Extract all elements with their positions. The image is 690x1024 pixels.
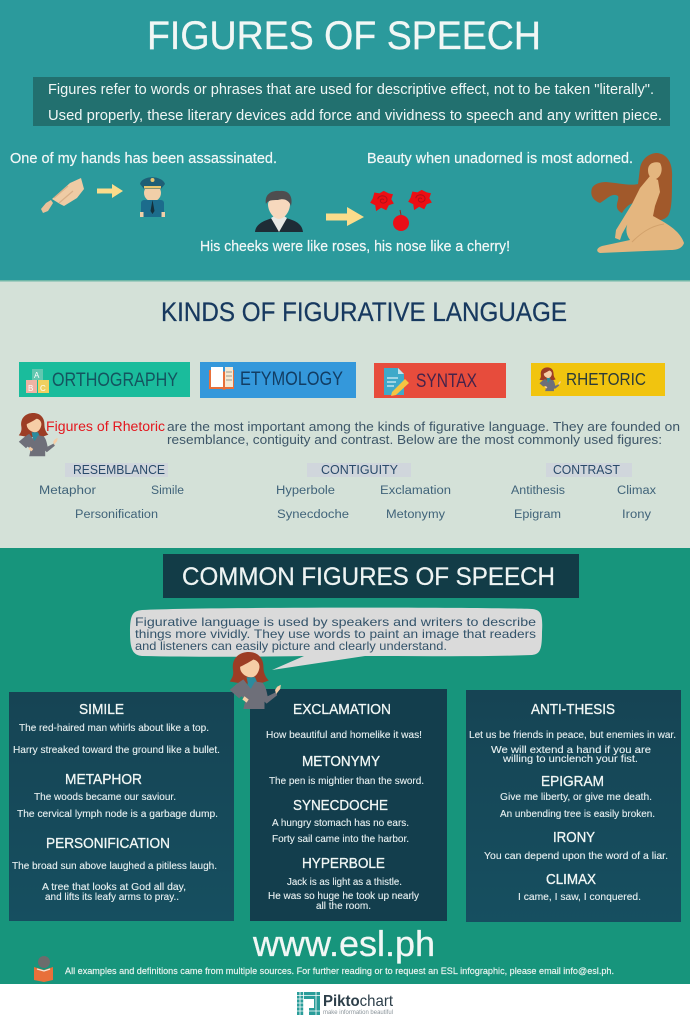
- group: contiguity: Exclamation: [380, 485, 451, 497]
- group: contiguity: [276, 463, 451, 521]
- card: exclamation, metonymy, synecdoche, hyperbole: EXCLAMATION: [293, 702, 391, 718]
- heading: KINDS OF FIGURATIVE LANGUAGE: [161, 297, 567, 327]
- group: resemblance: RESEMBLANCE: [73, 463, 165, 477]
- footer: piktochart logo: make information beautiful: [323, 1009, 393, 1016]
- card: anti-thesis, epigram, irony, climax: CLIMAX: [546, 872, 596, 888]
- group: contrast: CONTRAST: [553, 463, 620, 477]
- icon: piktochart mark: [297, 992, 320, 1015]
- card: simile, metaphor, personification: SIMILE: [79, 702, 124, 718]
- card: exclamation, metonymy, synecdoche, hyperbole: HYPERBOLE: [302, 856, 385, 872]
- example: man: [255, 191, 303, 232]
- card: simile, metaphor, personification: Harry streaked toward the ground like a bullet.: [13, 744, 220, 756]
- card: exclamation, metonymy, synecdoche, hyperbole: Forty sail came into the harbor.: [272, 833, 409, 845]
- card: anti-thesis, epigram, irony, climax: Let us be friends in peace, but enemies in war.: [469, 729, 676, 741]
- group: contrast: Epigram: [514, 509, 561, 521]
- website url: www.esl.ph: [252, 923, 435, 964]
- card: exclamation, metonymy, synecdoche, hyperbole: How beautiful and homelike it was!: [266, 729, 422, 741]
- card: anti-thesis, epigram, irony, climax: We will extend a hand if you are: [491, 745, 651, 756]
- group: contrast: Antithesis: [511, 485, 565, 497]
- card: exclamation, metonymy, synecdoche, hyperbole: He was so huge he took up nearly: [268, 891, 419, 902]
- card: simile, metaphor, personification: METAPHOR: [65, 772, 142, 788]
- rhetoric description: [46, 419, 680, 447]
- arrow: man to roses: [326, 207, 364, 226]
- group: contrast: Irony: [622, 509, 651, 521]
- icon: long-haired woman: [591, 153, 684, 253]
- card: exclamation, metonymy, synecdoche, hyperbole: The pen is mightier than the sword.: [269, 775, 424, 787]
- icon: presenter: [230, 652, 281, 709]
- card: anti-thesis, epigram, irony, climax: IRONY: [553, 830, 595, 846]
- card: simile, metaphor, personification: A tree that looks at God all day,: [42, 882, 186, 893]
- footer: piktochart logo: Piktochart: [323, 993, 394, 1010]
- card: exclamation, metonymy, synecdoche, hyperbole: METONYMY: [302, 754, 380, 770]
- rhetoric description: are the most important among the kinds of figurative language. They are founded on: [167, 419, 680, 434]
- card: anti-thesis, epigram, irony, climax: [466, 690, 681, 922]
- category: orthography: C: [40, 384, 46, 393]
- speech bubble: things more vividly. They use words to paint an image that readers: [135, 627, 536, 641]
- card: exclamation, metonymy, synecdoche, hyperbole: A hungry stomach has no ears.: [272, 817, 409, 829]
- rhetoric description: Figures of Rhetoric: [46, 419, 165, 434]
- card: simile, metaphor, personification: PERSONIFICATION: [46, 836, 170, 852]
- heading: [163, 554, 579, 598]
- card: simile, metaphor, personification: The cervical lymph node is a garbage dump.: [17, 808, 218, 820]
- card: simile, metaphor, personification: The red-haired man whirls about like a top.: [19, 722, 209, 734]
- icon: teacher: [19, 413, 58, 456]
- category: syntax: SYNTAX: [416, 371, 477, 392]
- group: contrast: [511, 463, 656, 521]
- icon: reader: [34, 956, 53, 982]
- example: cheeks text: His cheeks were like roses, his nose like a cherry!: [200, 239, 510, 255]
- group: contrast: Climax: [617, 485, 656, 497]
- heading: COMMON FIGURES OF SPEECH: [182, 563, 555, 591]
- category: etymology: ETYMOLOGY: [240, 369, 343, 390]
- card: simile, metaphor, personification: and lifts its leafy arms to pray..: [45, 892, 179, 903]
- card: anti-thesis, epigram, irony, climax: willing to unclench your fist.: [502, 754, 638, 765]
- category: syntax: [374, 363, 506, 398]
- group: resemblance: Simile: [151, 485, 184, 497]
- card: anti-thesis, epigram, irony, climax: You can depend upon the word of a liar.: [484, 850, 668, 862]
- group: contiguity: Synecdoche: [277, 509, 349, 521]
- speech bubble: Figurative language is used by speakers and writers to describe: [135, 615, 536, 629]
- intro text block: Used properly, these literary devices add force and vividness to speech and any written piece.: [48, 108, 662, 124]
- group: contiguity: Hyperbole: [276, 485, 335, 497]
- icon: police officer: [140, 177, 165, 217]
- example: hands text: One of my hands has been assassinated.: [10, 151, 277, 167]
- footer note: All examples and definitions came from multiple sources. For further reading or to request an ESL infographic, please email info@esl.ph.: [65, 966, 614, 976]
- intro text block: [33, 77, 670, 126]
- group: contiguity: Metonymy: [386, 509, 445, 521]
- card: anti-thesis, epigram, irony, climax: An unbending tree is easily broken.: [500, 808, 655, 820]
- category: orthography: A: [34, 371, 40, 380]
- panel: common figures of speech: [0, 548, 690, 984]
- category: rhetoric: RHETORIC: [566, 369, 646, 389]
- group: resemblance: Personification: [75, 509, 158, 521]
- category: orthography: [19, 362, 190, 397]
- arrow: hand to officer: [97, 184, 123, 198]
- card: exclamation, metonymy, synecdoche, hyperbole: Jack is as light as a thistle.: [287, 876, 402, 888]
- card: exclamation, metonymy, synecdoche, hyperbole: all the room.: [316, 901, 371, 912]
- card: anti-thesis, epigram, irony, climax: I came, I saw, I conquered.: [518, 891, 641, 903]
- intro text block: Figures refer to words or phrases that are used for descriptive effect, not to be taken "literally".: [48, 82, 654, 98]
- example: beauty text: Beauty when unadorned is most adorned.: [367, 151, 633, 167]
- category: etymology: [200, 362, 356, 398]
- rhetoric description: resemblance, contiguity and contrast. Below are the most commonly used figures:: [167, 432, 662, 447]
- speech bubble: and listeners can easily picture and clearly understand.: [135, 639, 447, 653]
- group: contiguity: CONTIGUITY: [321, 463, 399, 477]
- category: orthography: B: [28, 384, 33, 393]
- category: rhetoric: [531, 363, 665, 396]
- card: simile, metaphor, personification: [9, 692, 234, 921]
- group: resemblance: Metaphor: [39, 485, 96, 497]
- card: simile, metaphor, personification: The broad sun above laughed a pitiless laugh.: [12, 860, 217, 872]
- category: orthography: ORTHOGRAPHY: [52, 370, 178, 391]
- speech bubble: [130, 608, 542, 670]
- card: exclamation, metonymy, synecdoche, hyperbole: [250, 689, 447, 921]
- footer: piktochart logo: [0, 984, 690, 1024]
- card: exclamation, metonymy, synecdoche, hyperbole: SYNECDOCHE: [293, 798, 388, 814]
- card: anti-thesis, epigram, irony, climax: ANTI-THESIS: [531, 702, 615, 718]
- icon: severed hand: [41, 178, 84, 213]
- panel: introduction: [0, 0, 690, 281]
- panel: kinds of figurative language: [0, 280, 690, 549]
- card: simile, metaphor, personification: The woods became our saviour.: [34, 791, 176, 803]
- title: FIGURES OF SPEECH: [147, 14, 541, 58]
- icon: roses and cherry: [370, 190, 432, 231]
- group: resemblance: [39, 463, 184, 521]
- card: anti-thesis, epigram, irony, climax: EPIGRAM: [541, 774, 604, 790]
- card: anti-thesis, epigram, irony, climax: Give me liberty, or give me death.: [500, 791, 652, 803]
